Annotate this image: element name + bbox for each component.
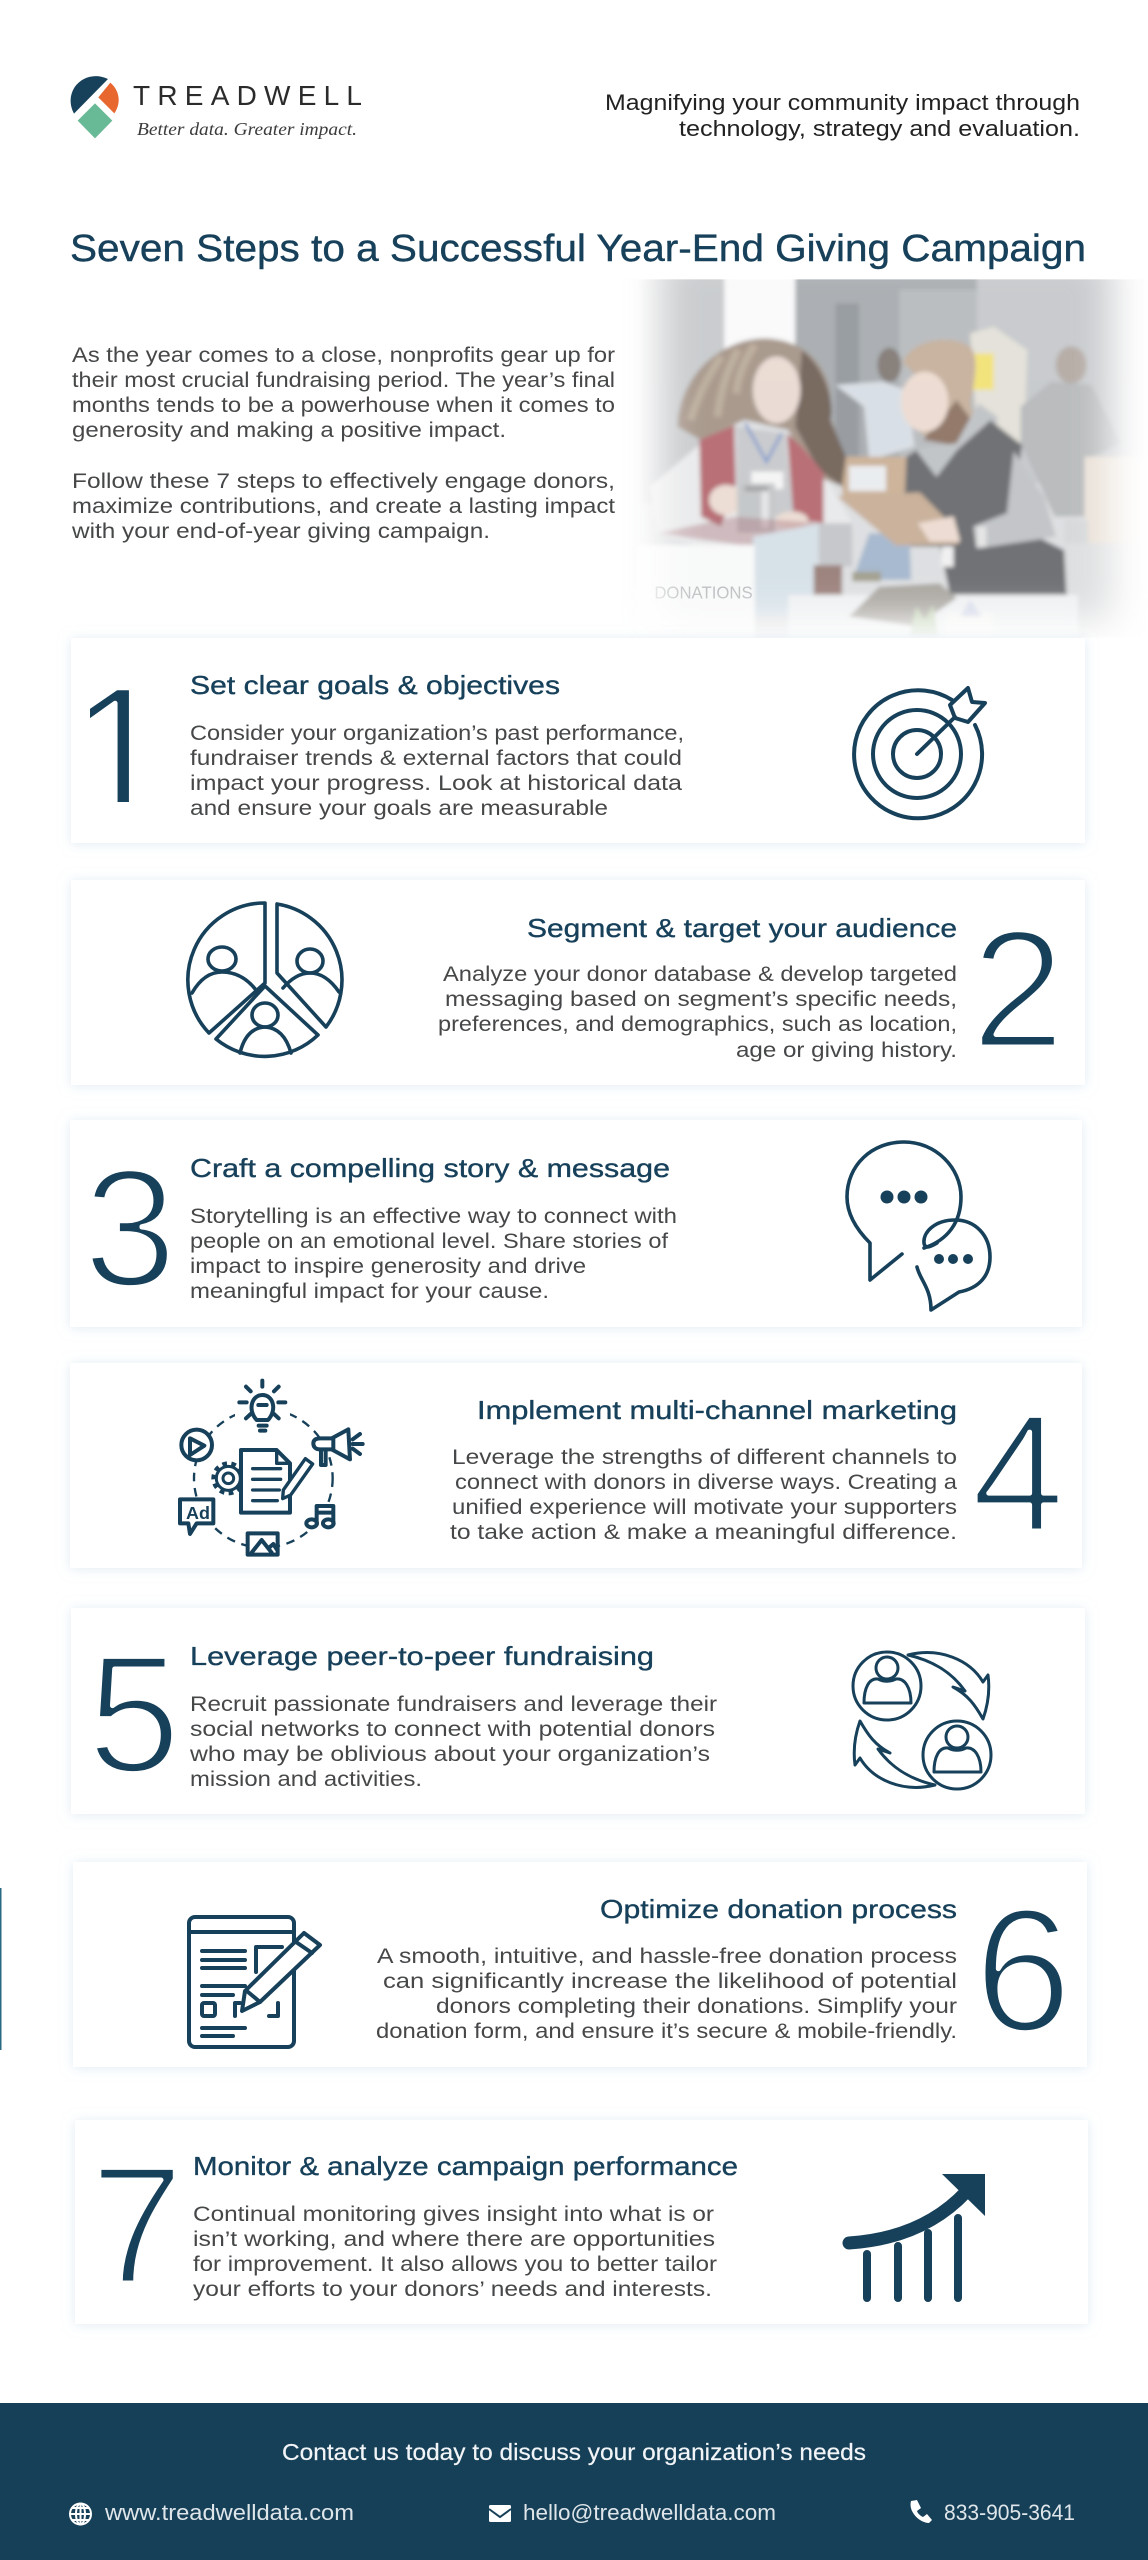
intro text: As the year comes to a close, nonprofits gear up for [72,344,615,367]
number 7: 7 [90,2131,184,2319]
body: mission and activities. [190,1768,422,1791]
footer [0,2403,1148,2560]
number 4: 4 [971,1379,1065,1567]
intro text [71,344,615,543]
card [70,1120,1082,1327]
icon: globe [70,2504,91,2524]
background man [877,348,901,382]
body: your efforts to your donors’ needs and interests. [193,2278,712,2301]
body: unified experience will motivate your supporters [452,1496,957,1519]
body [190,722,684,820]
heading: Segment & target your audience [527,913,957,943]
email: hello@treadwelldata.com [523,2500,776,2525]
heading: Craft a compelling story & message [190,1153,670,1183]
header tagline: Magnifying your community impact through [605,90,1080,115]
heading: Leverage peer-to-peer fundraising [190,1641,654,1671]
body: donation form, and ensure it’s secure & mobile-friendly. [376,2020,957,2043]
body [193,2203,717,2301]
icon: peer exchange [853,1652,991,1789]
intro text: Follow these 7 steps to effectively engage donors, [72,470,615,493]
header tagline [605,90,1080,141]
footer band [0,2403,1148,2560]
number 2: 2 [971,895,1065,1083]
heading: Optimize donation process [600,1894,957,1924]
body: social networks to connect with potential donors [190,1718,715,1741]
body: and ensure your goals are measurable [190,797,608,820]
heading: Implement multi-channel marketing [477,1395,957,1425]
icon: rising chart [849,2174,985,2298]
photo: volunteers at donation centre: DONATIONS [654,582,753,602]
number 3: 3 [83,1134,177,1322]
logo [71,76,362,139]
body: can significantly increase the likelihood of potential [383,1970,957,1993]
background right man [1056,346,1087,384]
panel: step 5 [71,1608,1085,1814]
intro text: with your end-of-year giving campaign. [71,520,490,543]
panel: step 2 [71,880,1085,1085]
body: messaging based on segment’s specific needs, [445,988,957,1011]
body: fundraiser trends & external factors that could [190,747,682,770]
body: donors completing their donations. Simplify your [436,1995,957,2018]
card [75,2120,1088,2324]
call to action: Contact us today to discuss your organization’s needs [282,2439,866,2465]
body: Consider your organization’s past performance, [190,722,684,745]
body [376,1945,957,2043]
body: Leverage the strengths of different channels to [452,1446,957,1469]
card [71,638,1085,843]
phone number: 833-905-3641 [944,2500,1075,2525]
panel: step 3 [70,1120,1082,1327]
body: who may be oblivious about your organization’s [189,1743,710,1766]
intro text: generosity and making a positive impact. [72,419,506,442]
body: impact to inspire generosity and drive [190,1255,586,1278]
body: age or giving history. [736,1039,957,1062]
logo tagline: Better data. Greater impact. [137,119,357,139]
icon: donation form [189,1917,320,2047]
icon: speech bubbles [847,1142,990,1310]
body: Storytelling is an effective way to connect with [190,1205,677,1228]
body: meaningful impact for your cause. [190,1280,549,1303]
number 6: 6 [974,1873,1072,2069]
body: for improvement. It also allows you to better tailor [193,2253,717,2276]
panel: step 6 [73,1862,1087,2069]
heading: Set clear goals & objectives [190,670,560,700]
card [71,880,1085,1085]
icon: phone [911,2500,932,2523]
icon: marketing channels [180,1380,363,1555]
body: Continual monitoring gives insight into what is or [193,2203,714,2226]
body [190,1205,677,1303]
intro text: maximize contributions, and create a lasting impact [72,495,615,518]
body: Recruit passionate fundraisers and leverage their [190,1693,717,1716]
number 1: 1 [69,649,171,855]
title: Seven Steps to a Successful Year-End Giving Campaign [70,228,1086,270]
left woman [653,445,848,544]
panel: step 1 [69,638,1085,855]
logo wordmark: TREADWELL [133,80,362,111]
number 5: 5 [87,1620,181,1808]
heading: Monitor & analyze campaign performance [193,2151,738,2181]
body [189,1693,717,1791]
icon: mail [489,2505,511,2522]
icon: marketing channels: Ad [186,1503,210,1523]
body: A smooth, intuitive, and hassle-free donation process [377,1945,957,1968]
card [70,1363,1082,1568]
photo: volunteers at donation centre [643,279,1130,636]
intro text: their most crucial fundraising period. The year’s final [72,369,615,392]
boxes [842,457,906,498]
icon: target [854,688,985,818]
icon: audience segments [188,903,342,1056]
card [73,1862,1087,2067]
panel: step 7 [75,2120,1088,2324]
body [438,963,957,1062]
body: isn’t working, and where there are opportunities [193,2228,715,2251]
website: www.treadwelldata.com [104,2500,354,2525]
body: to take action & make a meaningful difference. [450,1521,957,1544]
body: connect with donors in diverse ways. Creating a [455,1471,957,1494]
body: people on an emotional level. Share stories of [190,1230,668,1253]
body: preferences, and demographics, such as location, [438,1013,957,1036]
card [71,1608,1085,1814]
body: Analyze your donor database & develop targeted [443,963,957,986]
table items [788,591,1078,620]
panel: step 4 [70,1363,1082,1568]
logo mark [71,76,119,138]
body: impact your progress. Look at historical data [190,772,682,795]
intro text: months tends to be a powerhouse when it comes to [72,394,615,417]
right woman [903,340,977,447]
left edge line [0,1888,2,2050]
header tagline: technology, strategy and evaluation. [679,116,1080,141]
body [450,1446,957,1544]
